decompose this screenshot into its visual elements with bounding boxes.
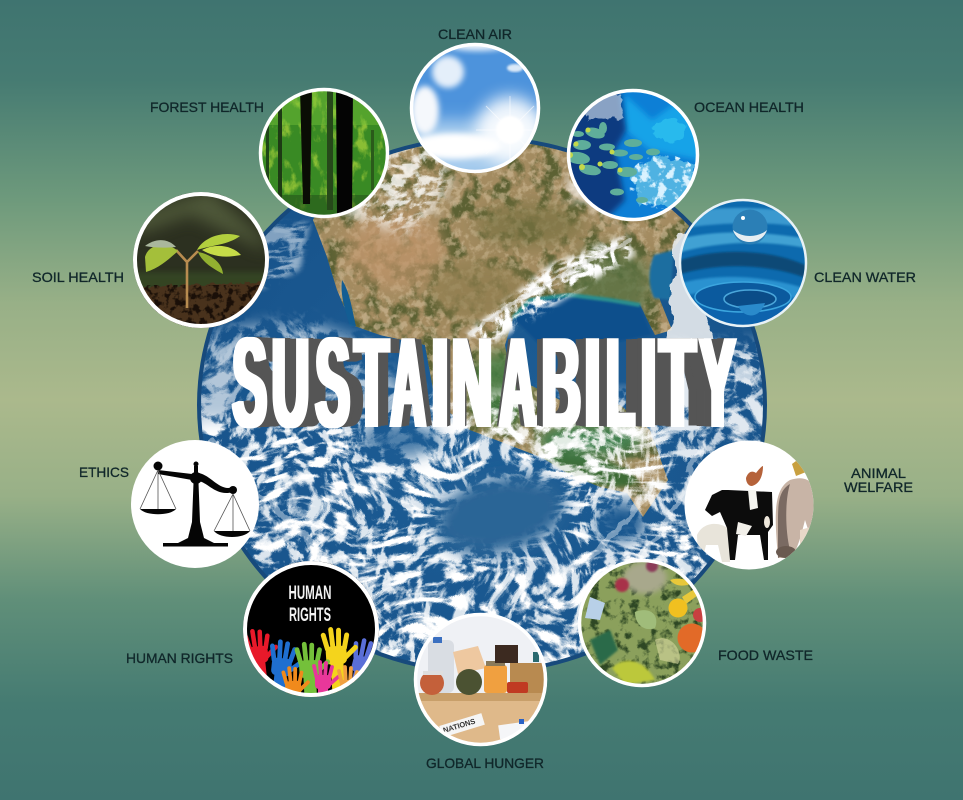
title: SUSTAINABILITY: I — [640, 312, 656, 455]
title: SUSTAINABILITY: B — [542, 310, 581, 454]
title: SUSTAINABILITY: A — [498, 313, 532, 454]
title: SUSTAINABILITY: L — [603, 312, 630, 455]
title: SUSTAINABILITY: T — [642, 314, 674, 453]
title: SUSTAINABILITY: A — [500, 310, 536, 455]
circle: animal welfare farm animals — [684, 440, 818, 570]
title: SUSTAINABILITY: N — [453, 311, 492, 453]
title: SUSTAINABILITY: T — [367, 314, 398, 453]
title: SUSTAINABILITY: B — [540, 311, 578, 454]
title: SUSTAINABILITY: Y — [678, 314, 710, 453]
circle: soil health photo — [133, 192, 269, 328]
label: global hunger: GLOBAL HUNGER — [426, 755, 544, 771]
title: SUSTAINABILITY: U — [272, 310, 309, 455]
label: soil health: SOIL HEALTH — [32, 269, 124, 285]
title: SUSTAINABILITY: I — [436, 313, 452, 453]
title: SUSTAINABILITY: S — [249, 312, 281, 454]
title: SUSTAINABILITY: Y — [700, 310, 736, 454]
title: SUSTAINABILITY: S — [232, 310, 267, 455]
title: SUSTAINABILITY: N — [452, 311, 492, 454]
title: SUSTAINABILITY: S — [240, 311, 273, 454]
globe: Earth seen from space — [197, 140, 767, 667]
title: SUSTAINABILITY: N — [455, 313, 491, 453]
title: SUSTAINABILITY: T — [358, 311, 391, 454]
title: SUSTAINABILITY: Y — [693, 311, 728, 454]
title: SUSTAINABILITY: I — [636, 311, 651, 454]
title: SUSTAINABILITY: T — [354, 312, 389, 456]
label: clean water: CLEAN WATER — [814, 269, 916, 285]
title: SUSTAINABILITY: L — [598, 312, 625, 454]
label: ethics: ETHICS — [79, 464, 129, 480]
title: SUSTAINABILITY: S — [315, 310, 350, 455]
title: SUSTAINABILITY: I — [433, 312, 450, 454]
title: SUSTAINABILITY: N — [452, 312, 492, 455]
title: SUSTAINABILITY: A — [498, 312, 530, 452]
circle: clean water photo — [678, 198, 808, 328]
title: SUSTAINABILITY: I — [625, 313, 639, 453]
title: SUSTAINABILITY: U — [293, 313, 326, 452]
title: SUSTAINABILITY: S — [326, 312, 358, 454]
title: SUSTAINABILITY: S — [320, 311, 354, 454]
donation label: NATIONS — [442, 717, 476, 735]
label: human rights: HUMAN RIGHTS — [126, 650, 233, 666]
title: SUSTAINABILITY: S — [332, 313, 363, 452]
title: SUSTAINABILITY: A — [393, 312, 427, 454]
title: SUSTAINABILITY: A — [400, 312, 431, 452]
title: SUSTAINABILITY — [232, 310, 736, 456]
title: SUSTAINABILITY: A — [396, 313, 429, 454]
label: animal welfare — [844, 465, 913, 495]
label: clean air: CLEAN AIR — [438, 26, 512, 42]
circle: human rights poster: RIGHTS — [289, 605, 331, 626]
circle: ocean health photo — [566, 88, 700, 222]
title: SUSTAINABILITY: A — [499, 313, 534, 454]
title: SUSTAINABILITY: B — [536, 314, 571, 453]
title: SUSTAINABILITY: I — [584, 312, 600, 455]
icon: water droplet — [732, 210, 768, 244]
title: SUSTAINABILITY: T — [648, 312, 682, 453]
title: SUSTAINABILITY: T — [654, 312, 689, 455]
title: SUSTAINABILITY: L — [594, 313, 619, 452]
circle: ethics balance scales — [131, 440, 259, 568]
title: SUSTAINABILITY: I — [630, 311, 645, 453]
circle: global hunger donation box — [414, 612, 548, 746]
title: SUSTAINABILITY: S — [257, 313, 288, 452]
label: forest health: FOREST HEALTH — [150, 99, 264, 115]
title: SUSTAINABILITY: I — [581, 311, 597, 454]
circle: human rights poster — [243, 561, 379, 697]
title: SUSTAINABILITY: T — [363, 311, 395, 453]
title: SUSTAINABILITY: L — [606, 310, 635, 455]
title: SUSTAINABILITY: I — [431, 311, 449, 455]
title: SUSTAINABILITY: B — [538, 313, 574, 454]
title: SUSTAINABILITY: Y — [685, 313, 719, 454]
label: food waste: FOOD WASTE — [718, 647, 813, 663]
label: animal welfare: ANIMAL — [851, 465, 906, 481]
title: SUSTAINABILITY: I — [578, 311, 593, 453]
label: animal welfare: WELFARE — [844, 479, 913, 495]
circle: human rights poster: HUMAN — [288, 583, 332, 604]
donation label — [439, 713, 485, 737]
title: SUSTAINABILITY: I — [574, 313, 589, 453]
label: ocean health: OCEAN HEALTH — [694, 99, 804, 115]
circle: clean air photo — [410, 42, 540, 174]
title: SUSTAINABILITY: U — [278, 311, 314, 454]
circle: food waste pile — [575, 555, 710, 690]
title: SUSTAINABILITY: I — [434, 311, 451, 453]
circle: forest health photo — [258, 88, 390, 218]
title: SUSTAINABILITY: T — [659, 311, 696, 455]
title: SUSTAINABILITY: U — [286, 312, 320, 454]
title: SUSTAINABILITY: A — [390, 311, 426, 455]
